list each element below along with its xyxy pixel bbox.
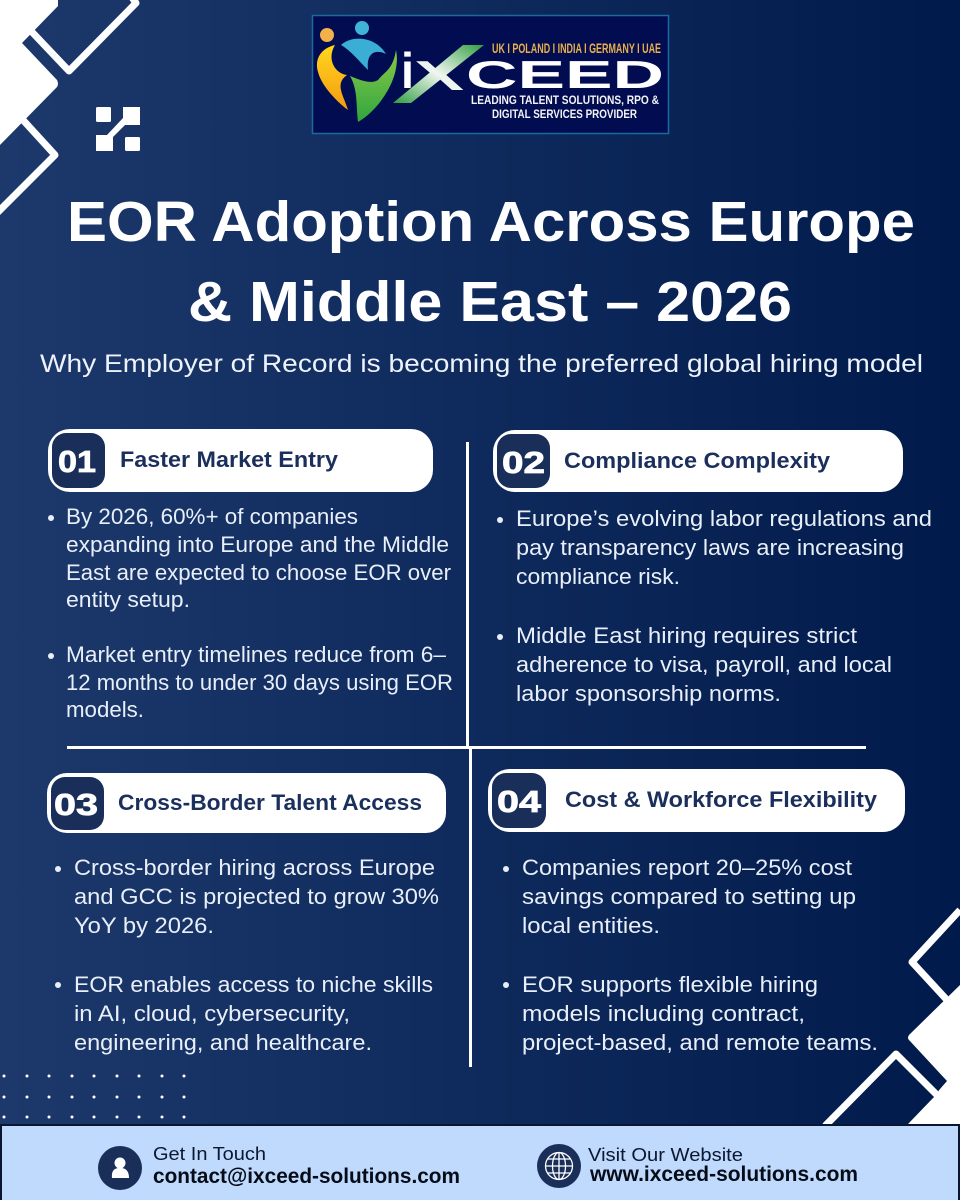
logo wordmark: i — [401, 43, 414, 99]
heading pill 01: 01 — [58, 444, 96, 479]
heading pill 03: Cross-Border Talent Access — [118, 790, 422, 815]
bullet list 04: savings compared to setting up — [522, 884, 856, 909]
website text: www.ixceed-solutions.com — [589, 1163, 858, 1186]
bullet list 01: expanding into Europe and the Middle — [66, 532, 449, 557]
bullet list 04: local entities. — [522, 913, 660, 938]
bullet list 01: Market entry timelines reduce from 6– — [66, 642, 447, 667]
bullet list 02: Middle East hiring requires strict — [516, 623, 857, 648]
bullet list 01 — [48, 504, 453, 722]
heading pill 04 — [488, 769, 905, 832]
bullet list 04: EOR supports flexible hiring — [522, 972, 818, 997]
footer bar — [1, 1125, 959, 1200]
logo tagline: DIGITAL SERVICES PROVIDER — [492, 109, 638, 121]
heading pill 02: 02 — [502, 445, 545, 480]
bullet list 03 — [55, 855, 439, 1055]
bullet list 03: EOR enables access to niche skills — [74, 972, 433, 997]
heading pill 02 — [493, 430, 903, 492]
logo wordmark — [393, 43, 664, 103]
contact text: contact@ixceed-solutions.com — [153, 1165, 460, 1188]
logo tagline: LEADING TALENT SOLUTIONS, RPO & — [471, 95, 659, 107]
bullet list 02 — [497, 506, 932, 706]
title: EOR Adoption Across Europe — [67, 190, 915, 254]
bullet list 03: in AI, cloud, cybersecurity, — [74, 1001, 350, 1026]
bullet list 02: Europe’s evolving labor regulations and — [516, 506, 932, 531]
bullet list 02: adherence to visa, payroll, and local — [516, 652, 892, 677]
website text: Visit Our Website — [588, 1145, 743, 1165]
title: & Middle East – 2026 — [188, 270, 792, 334]
bullet list 01: entity setup. — [66, 587, 190, 612]
contact text: Get In Touch — [153, 1144, 266, 1164]
bullet list 01: 12 months to under 30 days using EOR — [66, 670, 453, 695]
panel: compliance complexity — [493, 430, 932, 706]
bullet list 02: labor sponsorship norms. — [516, 681, 781, 706]
logo figure: people — [317, 21, 397, 122]
logo wordmark: X — [414, 52, 464, 99]
heading pill 04: 04 — [497, 784, 542, 819]
subtitle: Why Employer of Record is becoming the preferred global hiring model — [40, 350, 923, 378]
icon: person — [98, 1146, 142, 1190]
contact text — [153, 1144, 460, 1188]
heading pill 04: Cost & Workforce Flexibility — [565, 787, 878, 812]
website text — [588, 1145, 858, 1186]
decoration: top-left diamonds — [0, 0, 136, 215]
icon: brand mark — [96, 107, 140, 151]
bullet list 03: engineering, and healthcare. — [74, 1030, 372, 1055]
logo — [312, 16, 668, 134]
heading pill 01 — [48, 429, 433, 492]
bullet list 04: Companies report 20–25% cost — [522, 855, 852, 880]
heading pill 03: 03 — [54, 787, 98, 822]
heading pill 01: Faster Market Entry — [120, 447, 339, 472]
title — [67, 190, 915, 334]
decoration: dot grid — [2, 1074, 186, 1118]
logo wordmark: CEED — [466, 54, 664, 97]
decoration: bottom-right diamonds — [825, 910, 960, 1126]
panel: cross-border talent access — [47, 773, 446, 1055]
bullet list 01: East are expected to choose EOR over — [66, 560, 451, 585]
bullet list 03: Cross-border hiring across Europe — [74, 855, 435, 880]
heading pill 03 — [47, 773, 446, 833]
icon: globe — [537, 1144, 581, 1188]
bullet list 02: pay transparency laws are increasing — [516, 535, 904, 560]
heading pill 02: Compliance Complexity — [564, 448, 831, 473]
panel: faster market entry — [48, 429, 453, 722]
bullet list 04: project-based, and remote teams. — [522, 1030, 878, 1055]
panel: cost and workforce flexibility — [488, 769, 905, 1055]
bullet list 01: By 2026, 60%+ of companies — [66, 504, 358, 529]
bullet list 03: YoY by 2026. — [74, 913, 214, 938]
bullet list 02: compliance risk. — [516, 564, 680, 589]
bullet list 04: models including contract, — [522, 1001, 805, 1026]
bullet list 04 — [503, 855, 878, 1055]
quadrant dividers — [67, 442, 866, 1067]
bullet list 01: models. — [66, 697, 144, 722]
logo locations: UK I POLAND I INDIA I GERMANY I UAE — [492, 40, 661, 56]
bullet list 03: and GCC is projected to grow 30% — [74, 884, 439, 909]
logo tagline — [471, 95, 659, 121]
